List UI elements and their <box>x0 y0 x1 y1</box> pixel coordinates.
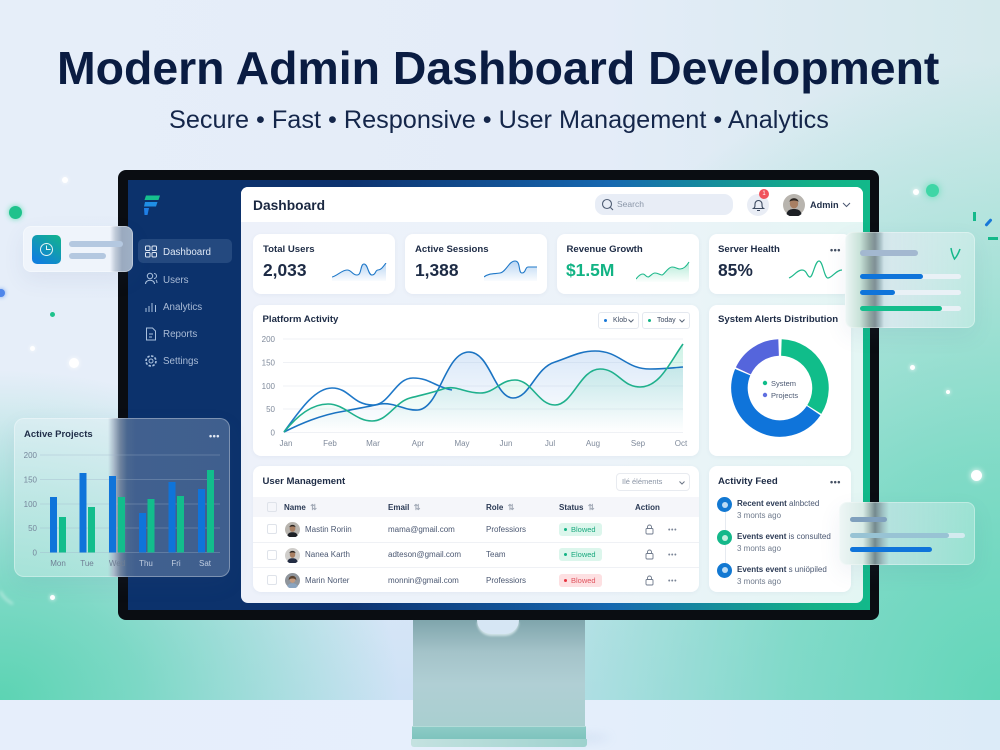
table row 3: Blowed <box>571 576 596 584</box>
feed item 3 <box>717 563 827 586</box>
base shadow <box>470 734 610 742</box>
table row 2: Nanea Karth <box>305 550 350 559</box>
line chart: Jul <box>545 439 555 448</box>
stat card: active sessions: 1,388 <box>415 260 459 280</box>
feed item 1: 3 monts ago <box>737 511 781 520</box>
bar chart: Fri <box>171 559 181 568</box>
text: Action <box>635 503 660 512</box>
table row 2: ••• <box>668 552 677 559</box>
table heading: User Management <box>262 476 345 486</box>
stat card: server health: Server Health <box>718 244 780 255</box>
page heading: Dashboard <box>253 198 325 213</box>
bar chart: 0 <box>33 548 38 558</box>
panel: system alerts distribution <box>709 305 851 456</box>
table row 2: Elowed <box>571 550 596 559</box>
bar chart: Wed <box>109 559 125 568</box>
table row 3: monnin@gmail.com <box>388 576 459 585</box>
line chart: Aug <box>586 439 600 448</box>
text: Email ⇅ <box>388 503 420 512</box>
sidebar navigation: Analytics <box>163 302 202 312</box>
table row 2: Team <box>486 550 506 559</box>
stat card: total users <box>253 234 395 294</box>
feed item 2: Events event is consulted <box>737 532 831 541</box>
line chart: Sep <box>631 439 646 448</box>
table dropdown <box>616 473 690 491</box>
glass card: summary bars <box>839 502 975 565</box>
line chart: 200 <box>262 335 276 344</box>
stat card: revenue growth <box>557 234 699 294</box>
line chart: 0 <box>271 428 276 438</box>
glass card: active projects: ••• <box>209 431 220 441</box>
feed item 1: Recent event alnbcted <box>737 499 819 508</box>
sidebar navigation: Settings <box>163 356 198 367</box>
feed item 2 <box>717 530 831 553</box>
search box <box>595 194 733 215</box>
table row 3: Professiors <box>486 576 526 585</box>
monitor screen <box>128 180 870 610</box>
table row 2: adteson@gmail.com <box>388 550 461 559</box>
filter: Today <box>642 312 690 329</box>
stat card: server health: ••• <box>830 245 841 255</box>
stat card: revenue growth: $1.5M <box>566 260 614 280</box>
filter: Klob <box>598 312 639 329</box>
panel heading: Platform Activity <box>262 314 338 325</box>
sidebar logo <box>144 196 160 215</box>
glass card: progress bars <box>845 232 975 328</box>
search box: Search <box>617 199 644 209</box>
sidebar navigation: Reports <box>163 328 197 340</box>
table row 3: ••• <box>668 578 677 585</box>
text: Status ⇅ <box>559 503 595 512</box>
line chart: Mar <box>366 439 380 448</box>
table row 1: Professiors <box>486 525 526 534</box>
bar chart: Sat <box>199 559 212 568</box>
feed item 2: 3 monts ago <box>737 544 781 553</box>
stat card: server health <box>709 234 851 294</box>
text: Name ⇅ <box>284 503 317 512</box>
feed item 1 <box>717 497 819 520</box>
stat card: total users: Total Users <box>263 244 315 255</box>
table row 3: Marin Norter <box>305 576 349 585</box>
title: Modern Admin Dashboard Development <box>57 42 939 94</box>
glass card: clock widget <box>23 226 133 272</box>
table row 1: mama@gmail.com <box>388 525 455 534</box>
panel: activity feed: ••• <box>830 477 841 487</box>
line chart: 100 <box>262 382 276 391</box>
donut chart <box>731 339 829 437</box>
stat card: revenue growth: Revenue Growth <box>566 244 643 255</box>
stat card: active sessions: Active Sessions <box>415 244 489 255</box>
chevron <box>842 202 850 208</box>
bar chart: 100 <box>24 500 38 509</box>
line chart: Jun <box>500 439 512 448</box>
line chart: Apr <box>412 439 425 448</box>
notification bell <box>747 194 769 216</box>
floor <box>0 700 1000 750</box>
glass card: active projects <box>14 418 230 577</box>
table row 1: ••• <box>668 527 677 534</box>
table row 1 <box>267 522 677 537</box>
line chart: May <box>454 439 470 448</box>
bar chart: 200 <box>24 451 38 460</box>
heading: Active Projects <box>24 429 93 440</box>
admin avatar <box>783 194 805 216</box>
line chart: Feb <box>323 439 337 448</box>
panel: activity feed <box>709 466 851 592</box>
bar chart: Thu <box>139 559 153 568</box>
notification bell: 1 <box>762 191 766 197</box>
panel: platform activity <box>253 305 699 456</box>
bar chart: 150 <box>24 476 38 484</box>
icon: check mark <box>950 248 961 260</box>
sidebar navigation: Dashboard <box>163 246 211 258</box>
monitor frame <box>118 170 879 620</box>
table <box>253 497 699 568</box>
feed item 3: 3 monts ago <box>737 576 781 586</box>
stat card: active sessions <box>405 234 547 294</box>
filter: Today: Today <box>657 317 676 324</box>
table row 1: Mastin Roriin <box>305 525 352 534</box>
feed item 3: Events event s uniöpiled <box>737 564 827 574</box>
monitor stand <box>411 620 587 747</box>
table row 2 <box>267 548 677 563</box>
bar chart: 50 <box>28 524 38 533</box>
line chart: Jan <box>280 439 292 448</box>
bar chart: Mon <box>50 559 66 568</box>
donut chart: Projects <box>771 391 798 400</box>
stat card: total users: 2,033 <box>263 260 307 280</box>
table dropdown: Ilé éléments <box>622 477 662 486</box>
line chart: Oct <box>675 439 688 448</box>
line chart: 150 <box>262 358 276 368</box>
subtitle: Secure • Fast • Responsive • User Management • Analytics <box>169 106 829 134</box>
sidebar navigation <box>138 239 232 367</box>
table row 1: Blowed <box>571 524 596 534</box>
panel: system alerts distribution: System Alerts Distribution <box>718 314 838 325</box>
nav icons <box>145 246 158 367</box>
line chart <box>262 335 688 448</box>
donut chart: System <box>771 379 796 388</box>
line chart: 50 <box>266 405 276 414</box>
icon: clock <box>32 235 61 264</box>
stat card: server health: 85% <box>718 260 753 280</box>
panel: user management <box>253 466 699 592</box>
active nav item <box>138 239 232 263</box>
top bar <box>241 187 863 222</box>
panel: activity feed: Activity Feed <box>718 476 778 486</box>
bar chart <box>24 451 220 568</box>
sidebar navigation: Users <box>163 274 189 286</box>
filter: Klob: Klob <box>613 317 627 324</box>
admin name: Admin <box>810 200 839 210</box>
main content area <box>241 187 863 603</box>
text: Role ⇅ <box>486 503 514 512</box>
bar chart: Tue <box>80 559 94 568</box>
table row 3 <box>267 573 677 588</box>
table header row <box>267 502 660 512</box>
